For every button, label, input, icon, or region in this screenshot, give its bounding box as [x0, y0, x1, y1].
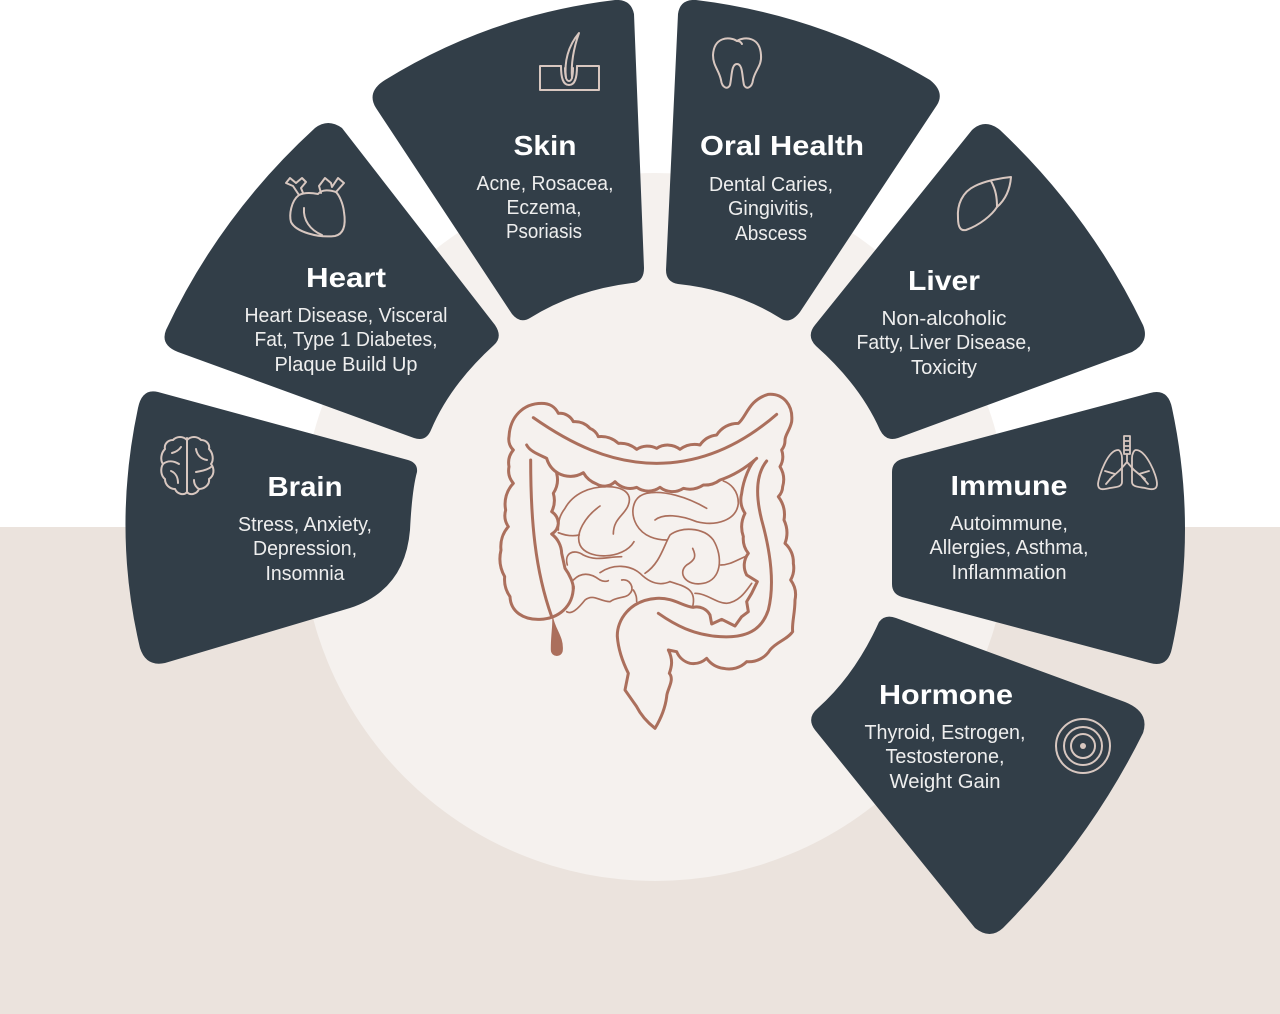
panel: immune — [892, 392, 1185, 664]
text: heart conditions: Heart Disease, Visceral — [244, 305, 448, 327]
heading: oral health: Oral Health — [700, 130, 864, 161]
large intestine — [500, 394, 796, 728]
icon: hair follicle — [540, 33, 599, 90]
panel: liver — [811, 124, 1145, 439]
heading: skin: Skin — [514, 130, 576, 161]
text: liver conditions: Fatty, Liver Disease, — [856, 332, 1032, 354]
oral health panel shape — [666, 0, 940, 320]
panel: brain — [125, 391, 417, 664]
heading: heart: Heart — [306, 262, 386, 293]
text: brain conditions: Depression, — [253, 538, 357, 560]
immune panel shape — [892, 392, 1185, 664]
panel: oral health — [666, 0, 940, 320]
text: oral conditions: Dental Caries, — [709, 174, 833, 196]
text: heart conditions — [244, 305, 448, 376]
appendix tip — [551, 617, 562, 655]
text: immune conditions — [930, 513, 1088, 584]
text: hormone conditions: Weight Gain — [890, 771, 1000, 793]
heart panel shape — [164, 123, 499, 439]
text: brain conditions — [238, 514, 372, 585]
small intestine — [558, 481, 752, 613]
liver panel shape — [811, 124, 1145, 439]
icon: lungs — [1098, 436, 1157, 489]
panel: skin — [373, 0, 644, 320]
heading: hormone: Hormone — [879, 679, 1013, 710]
heading: brain: Brain — [268, 471, 342, 502]
text: liver conditions — [856, 308, 1032, 379]
text: skin conditions — [476, 173, 614, 243]
text: hormone conditions — [864, 722, 1026, 793]
text: immune conditions: Allergies, Asthma, — [930, 537, 1088, 559]
text: liver conditions: Toxicity — [911, 357, 977, 379]
icon: heart — [286, 178, 345, 236]
icon: liver — [958, 177, 1011, 230]
text: skin conditions: Acne, Rosacea, — [476, 173, 614, 195]
text: skin conditions: Psoriasis — [506, 221, 582, 243]
text: hormone conditions: Testosterone, — [886, 746, 1004, 768]
text: immune conditions: Inflammation — [952, 562, 1066, 584]
panel: hormone — [811, 617, 1145, 934]
text: brain conditions: Stress, Anxiety, — [238, 514, 372, 536]
hormone panel shape — [811, 617, 1145, 934]
panel: heart — [164, 123, 499, 439]
brain panel shape — [125, 391, 417, 664]
text: oral conditions — [709, 174, 833, 245]
text: immune conditions: Autoimmune, — [950, 513, 1068, 535]
intestine illustration — [500, 394, 796, 728]
icon: target — [1056, 719, 1110, 773]
text: skin conditions: Eczema, — [506, 197, 582, 219]
text: heart conditions: Plaque Build Up — [274, 354, 418, 376]
icon: brain — [161, 437, 213, 494]
heading: immune: Immune — [950, 470, 1068, 501]
text: oral conditions: Gingivitis, — [728, 198, 814, 220]
skin panel shape — [373, 0, 644, 320]
icon: tooth — [713, 38, 761, 88]
text: oral conditions: Abscess — [735, 223, 807, 245]
text: heart conditions: Fat, Type 1 Diabetes, — [254, 329, 438, 351]
heading: liver: Liver — [908, 265, 980, 296]
text: brain conditions: Insomnia — [266, 563, 345, 585]
central circle — [301, 173, 1009, 881]
text: hormone conditions: Thyroid, Estrogen, — [864, 722, 1026, 744]
background lower band — [0, 527, 1280, 1014]
text: liver conditions: Non-alcoholic — [882, 308, 1006, 330]
